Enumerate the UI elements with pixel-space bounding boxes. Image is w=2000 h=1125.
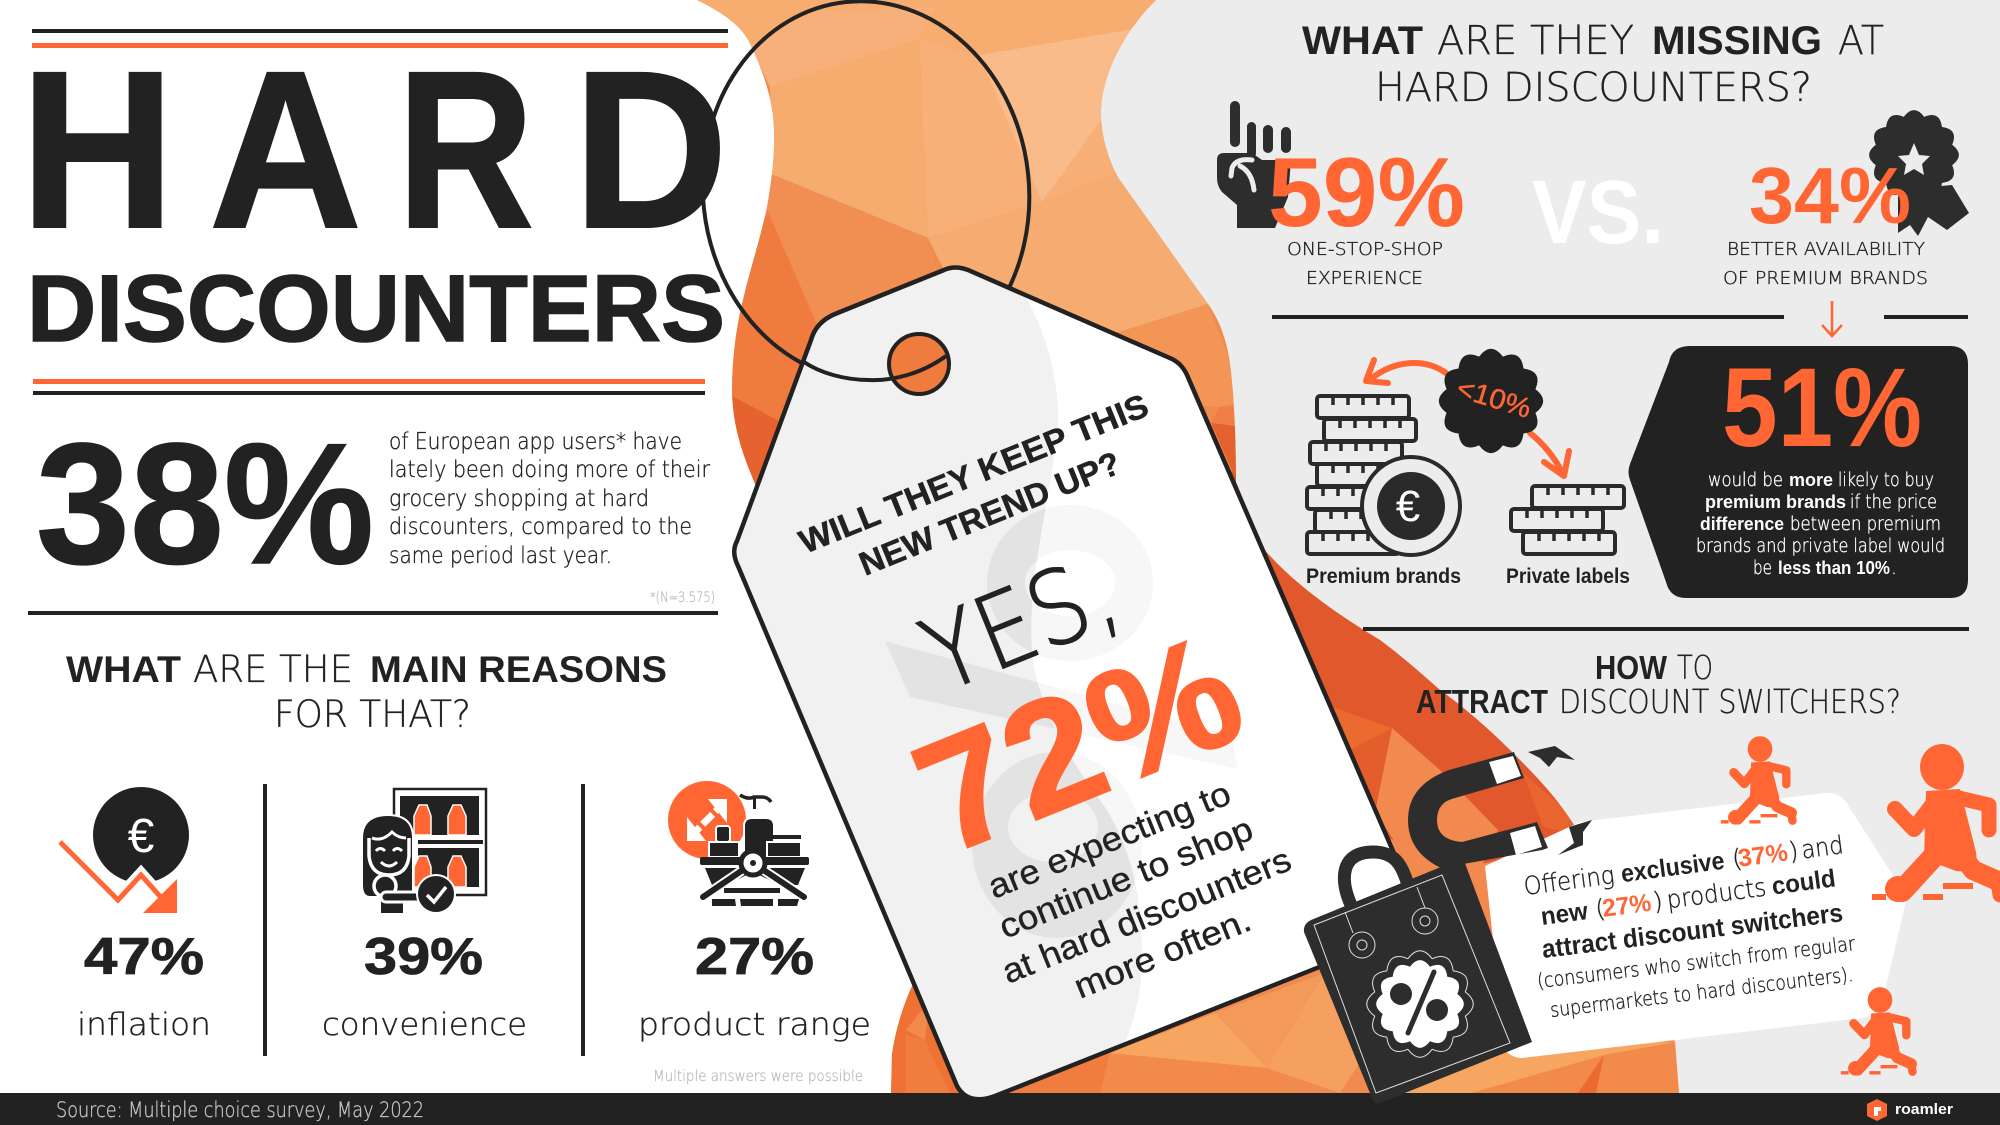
stat: 27% product range: 27% — [695, 928, 814, 986]
big stat 38%: 38% — [36, 408, 374, 600]
icon: bolts — [1528, 746, 1592, 855]
label: one-stop-shop: ONE-STOP-SHOP — [1287, 239, 1443, 260]
icon: basket with expand arrows — [668, 781, 809, 906]
heading: what are they missing: AT — [1838, 18, 1884, 64]
panel: white offer card: attract discount switchers — [1540, 897, 1844, 964]
panel: 51% callout: between premium — [1790, 514, 1941, 535]
panel: 51% callout — [1628, 345, 1968, 598]
panel: white offer card: ( — [1730, 844, 1744, 874]
heading: main reasons: MAIN REASONS — [370, 649, 667, 690]
footer bar: Source: Multiple choice survey, May 2022 — [56, 1098, 424, 1122]
heading: what are they missing: HARD DISCOUNTERS? — [1375, 65, 1812, 111]
heading: how to attract: ATTRACT — [1416, 683, 1548, 720]
panel: 51% callout: . — [1891, 558, 1897, 579]
badge <10%: <10% — [1453, 372, 1535, 424]
heading: what are they missing: ARE THEY — [1437, 18, 1634, 64]
stat description: of European app users* have — [389, 429, 682, 455]
heading: how to attract: TO — [1677, 648, 1713, 687]
title: HARD — [20, 25, 728, 275]
stat: 39% convenience: convenience — [322, 1007, 527, 1043]
price tag — [732, 265, 1401, 1097]
panel: 51% callout: 51% — [1722, 345, 1922, 470]
tag description: more often. — [1069, 901, 1256, 1006]
icon: euro falling arrow: € — [128, 810, 155, 863]
panel: white offer card — [1485, 793, 1907, 1058]
icon: magnet — [1408, 752, 1548, 868]
icon: shopping bag with percent — [1304, 858, 1532, 1103]
panel: white offer card: Offering — [1522, 860, 1616, 901]
heading: how to attract: DISCOUNT SWITCHERS? — [1559, 682, 1901, 721]
label: premium availability — [1723, 239, 1928, 289]
tag description — [983, 775, 1297, 1006]
panel: 51% callout: difference — [1700, 513, 1784, 534]
stat: 47% inflation: 47% — [84, 928, 204, 986]
panel: white offer card: 37% — [1736, 838, 1790, 873]
roamler logo — [1867, 1099, 1953, 1121]
icon: award rosette — [1869, 110, 1969, 236]
stat: 59%: 59% — [1268, 137, 1465, 247]
tag description: continue to shop — [994, 810, 1258, 946]
icon: walker right — [1872, 744, 2000, 902]
roamler logo: roamler — [1895, 1101, 1953, 1118]
panel: 51% callout: less than 10% — [1778, 557, 1890, 578]
heading: how to attract — [1416, 648, 1901, 721]
panel: white offer card: (consumers who switch from regular — [1536, 931, 1857, 993]
label: premium availability: OF PREMIUM BRANDS — [1723, 268, 1928, 289]
stat: 47% inflation: inflation — [77, 1007, 211, 1043]
stat: 39% convenience — [322, 928, 527, 1043]
panel: white offer card: ) — [1787, 836, 1800, 866]
stat description: grocery shopping at hard — [389, 486, 649, 512]
tag YES: YES, — [907, 532, 1134, 716]
stat: 47% inflation — [77, 928, 211, 1043]
panel: white offer card: and — [1800, 830, 1845, 864]
heading: what are they missing — [1302, 18, 1884, 111]
badge <10% — [1439, 349, 1543, 453]
title: HARD: R — [397, 25, 534, 275]
icon: walker bottom — [1841, 987, 1912, 1076]
stat: 39% convenience: 39% — [364, 928, 483, 986]
tag 72%: 72% — [893, 601, 1265, 888]
icon: premium brand coin stack: € — [1396, 482, 1420, 531]
icon: walker top — [1721, 736, 1792, 825]
heading: main reasons: WHAT — [66, 649, 181, 690]
heading: what are they missing: WHAT — [1302, 19, 1423, 63]
stat: 27% product range — [638, 928, 871, 1043]
stat: 27% product range: product range — [638, 1007, 871, 1043]
stat description: discounters, compared to the — [389, 514, 692, 540]
title: HARD: A — [209, 25, 362, 275]
background: orange low-poly blob — [680, 0, 1690, 1100]
panel: 51% callout: premium brands — [1705, 491, 1846, 512]
heading: main reasons: FOR THAT? — [274, 693, 471, 736]
panel: white offer card: exclusive — [1619, 847, 1726, 888]
tag description: at hard discounters — [997, 841, 1297, 991]
label: private labels: Private labels — [1506, 565, 1630, 588]
label: premium brands: Premium brands — [1306, 565, 1461, 588]
title: HARD: D — [573, 25, 728, 275]
stat description — [389, 429, 710, 569]
panel: white offer card: could — [1770, 864, 1837, 901]
string loop — [684, 0, 1048, 397]
title: rules below — [33, 379, 705, 395]
panel: 51% callout: likely to buy — [1838, 470, 1934, 491]
panel: 51% callout: be — [1753, 558, 1772, 579]
heading: main reasons: ARE THE — [193, 648, 353, 691]
VS: VS. — [1532, 163, 1664, 263]
icon: convenience shelves and person — [362, 789, 486, 913]
tag question: WILL THEY KEEP THIS — [794, 386, 1153, 560]
panel: white offer card: products — [1665, 873, 1768, 914]
background: grey right panel — [1100, 0, 2000, 1095]
title: DISCOUNTERS: DISCOUNTERS — [27, 256, 725, 362]
stat description: lately been doing more of their — [389, 457, 710, 483]
icon: premium brand coin stack — [1307, 396, 1460, 555]
heading: how to attract: HOW — [1595, 649, 1668, 686]
panel: 51% callout: more — [1789, 469, 1833, 490]
stat description: same period last year. — [389, 543, 612, 569]
arrows from badge — [1366, 360, 1569, 476]
panel: 51% callout: if the price — [1850, 492, 1937, 513]
icon: hand pointing — [1217, 101, 1291, 228]
panel: 51% callout: brands and private label would — [1696, 536, 1945, 557]
label: one-stop-shop — [1287, 239, 1443, 289]
title: HARD: H — [20, 25, 175, 275]
stat: 34%: 34% — [1749, 151, 1911, 240]
icon: private label coin stack — [1511, 486, 1624, 554]
note: multiple answers: Multiple answers were possible — [653, 1067, 863, 1085]
arrow down — [1822, 301, 1842, 336]
string front — [804, 356, 946, 380]
dividers — [263, 784, 585, 1056]
panel: white offer card: ) — [1651, 886, 1664, 916]
label: premium availability: BETTER AVAILABILITY — [1727, 239, 1925, 260]
heading: main reasons — [66, 648, 667, 736]
tag description: are expecting to — [983, 775, 1236, 906]
icon: bag handle — [1344, 852, 1408, 905]
label: one-stop-shop: EXPERIENCE — [1306, 268, 1423, 289]
panel: white offer card: new — [1539, 897, 1590, 931]
title: rules above — [32, 29, 728, 48]
heading: what are they missing: MISSING — [1652, 19, 1822, 63]
panel: white offer card: 27% — [1601, 889, 1653, 923]
sample note: *(N=3.575) — [650, 590, 715, 606]
tag question: NEW TREND UP? — [854, 444, 1125, 582]
tag hole — [889, 334, 949, 394]
panel: white offer card: supermarkets to hard discounters). — [1549, 962, 1854, 1022]
footer bar — [0, 1093, 2000, 1125]
icon: euro falling arrow — [60, 787, 189, 913]
panel: 51% callout: would be — [1708, 470, 1783, 491]
panel: white offer card: ( — [1594, 894, 1607, 924]
